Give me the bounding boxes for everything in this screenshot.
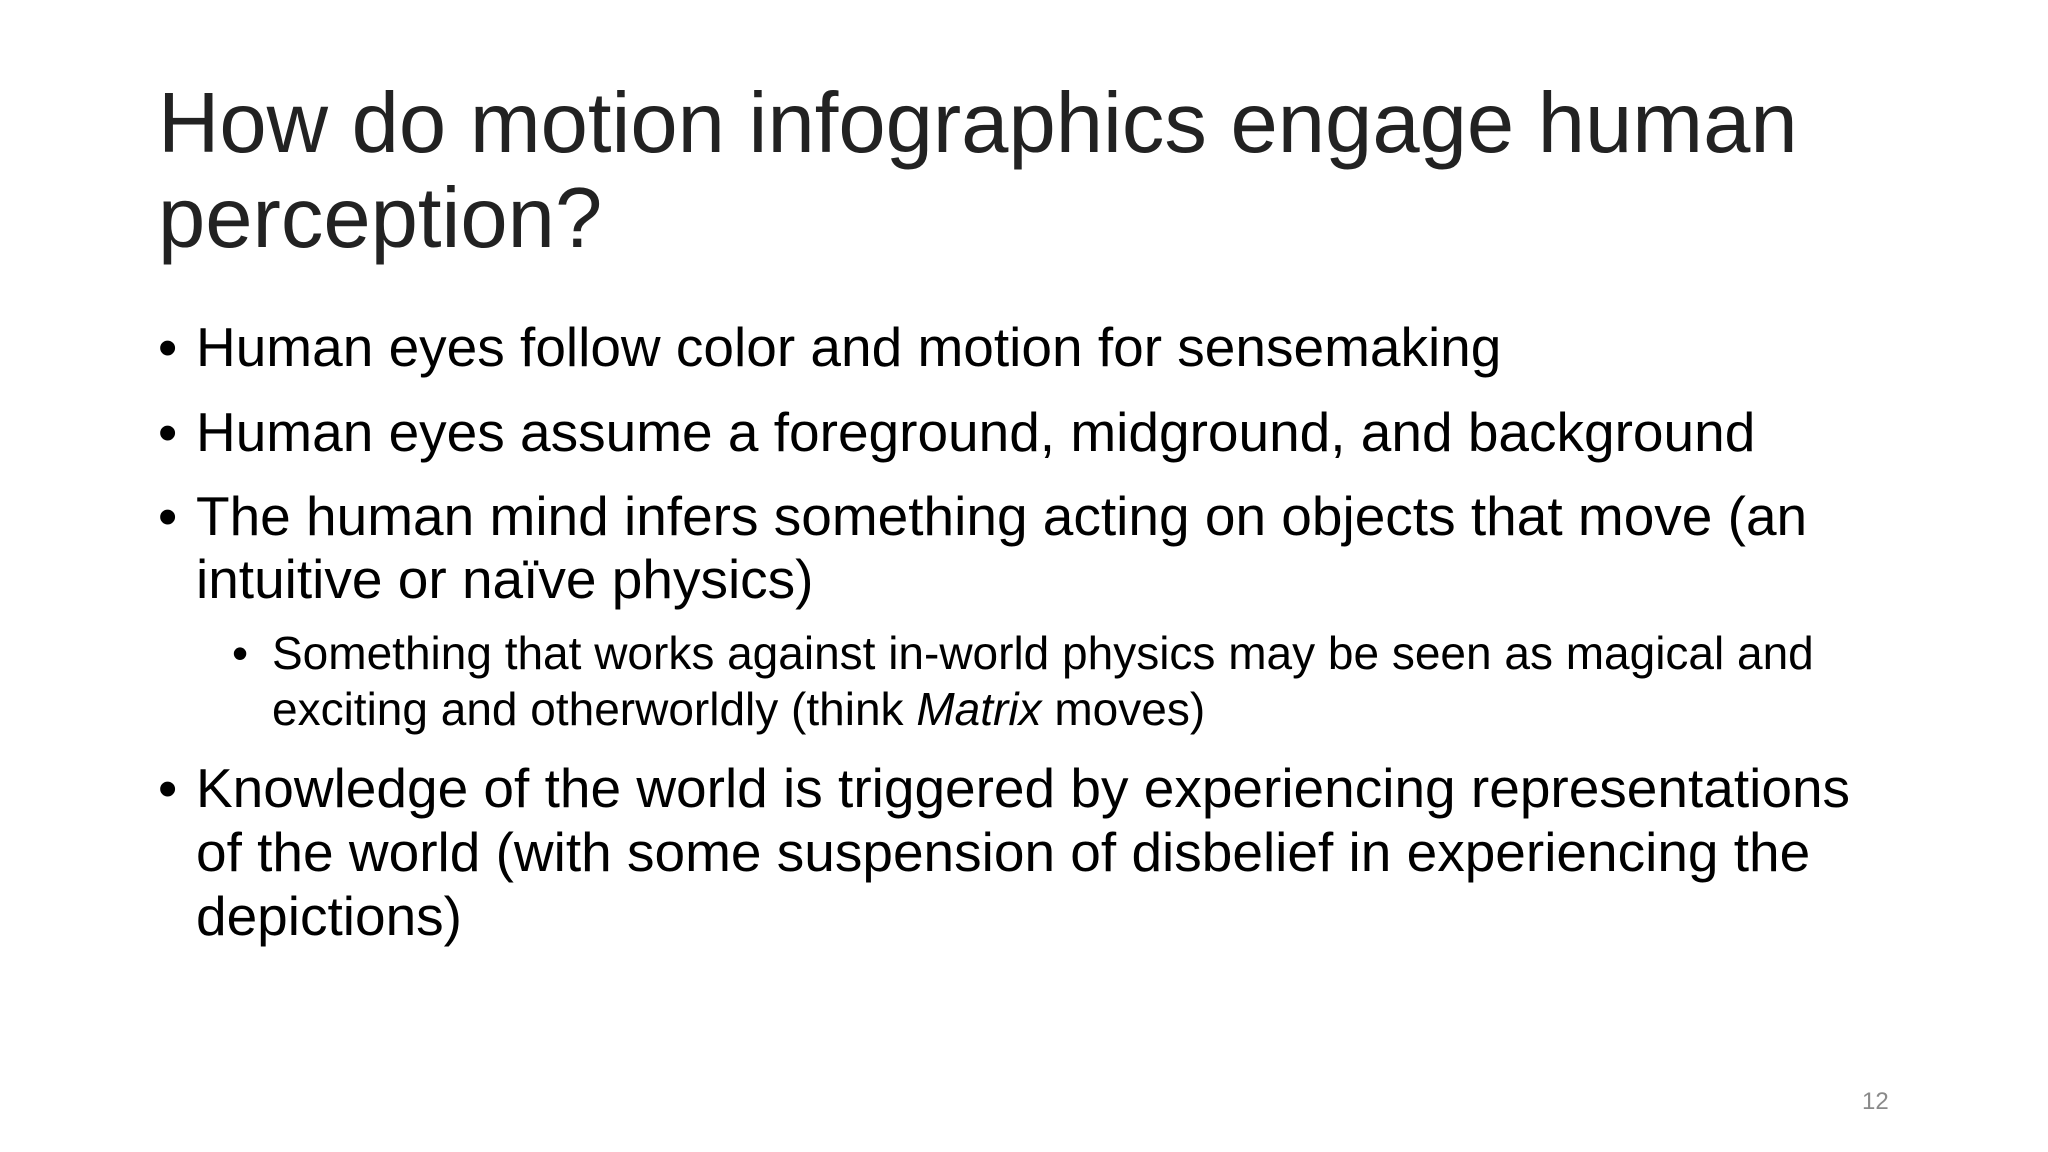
sub-bullet: Something that works against in-world physics may be seen as magical and	[272, 627, 1814, 679]
bullet 4: •	[158, 757, 177, 819]
title: perception?	[158, 171, 602, 266]
bullet 4: Knowledge of the world is triggered by experiencing representations	[196, 757, 1850, 819]
bullet 4	[158, 757, 1850, 947]
sub-bullet: exciting and otherworldly (think Matrix moves)	[272, 683, 1205, 735]
sub-bullet: •	[232, 627, 248, 679]
bullet 3: The human mind infers something acting on objects that move (an	[196, 485, 1807, 547]
bullet 3: intuitive or naïve physics)	[196, 548, 814, 610]
sub-bullet	[232, 627, 1814, 735]
bullet 2: Human eyes assume a foreground, midground, and background	[196, 401, 1755, 463]
bullet 4: depictions)	[196, 885, 462, 947]
bullet 3: •	[158, 485, 177, 547]
title: How do motion infographics engage human	[158, 76, 1798, 171]
bullet 2: •	[158, 401, 177, 463]
page number: 12	[1862, 1088, 1889, 1115]
bullet 3	[158, 485, 1807, 610]
bullet 1: •	[158, 316, 177, 378]
title	[158, 76, 1798, 266]
bullet 4: of the world (with some suspension of disbelief in experiencing the	[196, 821, 1810, 883]
bullet 1: Human eyes follow color and motion for sensemaking	[196, 316, 1501, 378]
